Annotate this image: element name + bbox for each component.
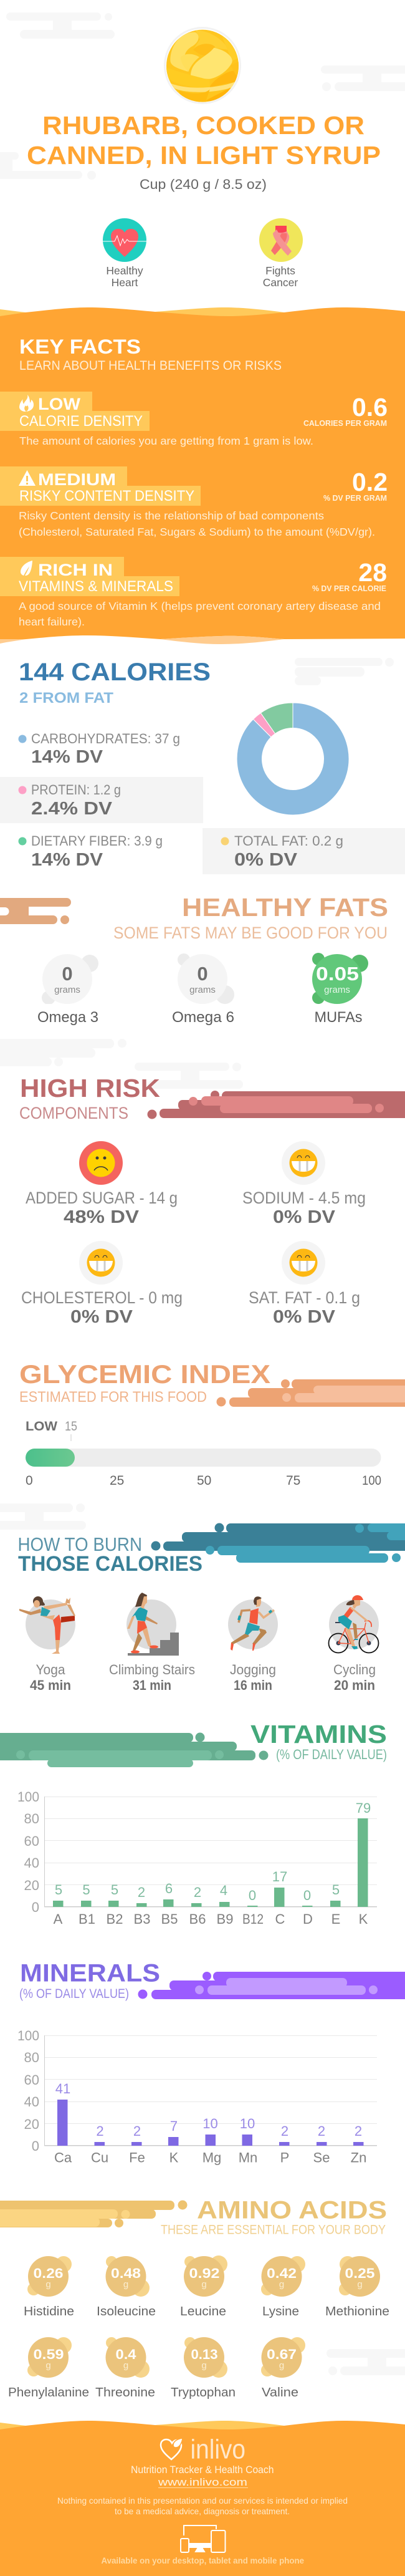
item: added sugar: 48% DV [64,1207,140,1227]
gauge: glycemic index: LOW [26,1419,57,1434]
legend: carbohydrates: 14% DV [31,747,103,767]
bar chart: vitamins: B2 [107,1911,123,1927]
amino acid: threonine [95,2337,155,2400]
bar chart: minerals: 2 [355,2123,362,2139]
bar chart: minerals: 2 [281,2123,288,2139]
bar chart: vitamins: B9 [217,1911,233,1927]
labels: activities: Climbing Stairs [109,1662,195,1677]
legend: dietary fiber: DIETARY FIBER: 3.9 g [31,833,163,849]
heading: key facts [19,335,282,373]
amino acid: lysine [261,2256,305,2318]
fact: medium risky content density: Risky Content density is the relationship of bad components [19,509,324,522]
amino acid: leucine: 0.92 [189,2265,219,2281]
bar chart: minerals: K [169,2150,179,2165]
fact: medium risky content density [0,466,388,538]
legend: protein [0,777,203,823]
bar chart: vitamins: 0 [32,1899,39,1915]
amino acid: histidine: 0.26 [34,2265,64,2281]
label: fights cancer: Fights [265,264,295,277]
amino acid: phenylalanine: Phenylalanine [8,2386,89,2400]
heading: amino acids: AMINO ACIDS [197,2196,387,2224]
bar chart: minerals: 10 [240,2116,255,2131]
amino acid: valine: g [279,2360,284,2371]
heading: amino acids [161,2196,387,2237]
bar chart: minerals: Cu [91,2150,108,2165]
amino acid: tryptophan: Tryptophan [171,2386,236,2400]
amino acid: isoleucine: Isoleucine [97,2305,156,2318]
fact: medium risky content density: % DV PER GRAM [323,493,387,503]
bar chart: minerals: 41 [55,2081,70,2096]
bar chart: vitamins: K [359,1911,368,1927]
labels: activities: Yoga [36,1662,65,1677]
bar chart: vitamins: 100 [17,1789,39,1805]
bar chart: vitamins: 60 [24,1833,39,1849]
heading: healthy fats: HEALTHY FATS [182,893,388,922]
amino acid: isoleucine [97,2256,156,2318]
label: healthy heart: Healthy [106,264,143,277]
amino acid: methionine: g [357,2279,363,2290]
title: CANNED, IN LIGHT SYRUP [27,141,381,170]
labels: activities: 45 min [30,1677,71,1693]
bar chart: vitamins: 80 [24,1811,39,1826]
bar chart: minerals: Zn [351,2150,366,2165]
fact: rich in vitamins and minerals [0,557,387,628]
heading: calories [19,658,211,707]
legend: carbohydrates: CARBOHYDRATES: 37 g [31,731,180,746]
bubble: MUFAs: 0.05 [316,963,359,985]
bar chart: vitamins: 0 [303,1888,311,1903]
amino acid: lysine: 0.42 [267,2265,297,2281]
heading: how to burn those calories: THOSE CALORIES [18,1552,202,1576]
bubble: MUFAs [312,953,368,1026]
bar chart: vitamins: B6 [189,1911,206,1927]
bar chart: minerals: 10 [202,2116,218,2131]
bar chart: vitamins: 5 [332,1882,340,1898]
heading: key facts: KEY FACTS [19,335,141,358]
bar chart: minerals: 40 [24,2094,39,2110]
amino acid: threonine: Threonine [95,2386,155,2400]
bar chart: vitamins: B5 [161,1911,178,1927]
banner: vitamins [0,1732,268,1767]
amino acid: tryptophan [171,2337,236,2400]
bar chart: vitamins: 2 [138,1884,145,1900]
legend: protein: 2.4% DV [31,799,113,819]
bar chart: minerals: 60 [24,2072,39,2088]
heading: key facts: LEARN ABOUT HEALTH BENEFITS OR RISKS [19,359,282,373]
legend: total fat: 0% DV [234,850,298,870]
amino acid: isoleucine: g [123,2279,128,2290]
amino acid: valine [261,2337,305,2400]
heading: minerals: (% OF DAILY VALUE) [19,1987,129,2001]
disclaimer: Nothing contained in this presentation and our services is intended or implied [57,2496,348,2506]
heading: how to burn those calories: HOW TO BURN [17,1533,142,1555]
fact: low calorie density: CALORIES PER GRAM [303,418,387,428]
bubble: omega 3: 0 [62,963,73,985]
amino acid: threonine: 0.4 [116,2347,136,2362]
bubble: omega 6: 0 [197,963,208,985]
banner: minerals [138,1972,405,1999]
amino acid: histidine: Histidine [24,2305,74,2318]
bar chart: vitamins: C [275,1911,285,1927]
fact: rich in vitamins and minerals: 28 [358,558,387,587]
activity: climbing stairs [126,1593,179,1656]
bar chart: minerals: 2 [133,2123,141,2139]
bar chart: vitamins: 2 [194,1884,201,1900]
amino acid: histidine: g [45,2279,51,2290]
gauge: glycemic index: 75 [286,1474,300,1488]
bar chart: vitamins: 17 [272,1869,287,1884]
amino acid: threonine: g [123,2360,128,2371]
label: fights cancer: Cancer [263,276,298,289]
bar chart: minerals: 2 [318,2123,325,2139]
panel: key facts [0,307,405,644]
bubble: omega 3 [37,954,98,1026]
heading: vitamins [250,1720,387,1762]
bar chart: vitamins: E [331,1911,340,1927]
labels: activities [30,1662,376,1693]
amino acid: tryptophan: 0.13 [191,2347,218,2362]
label: healthy heart [106,264,143,289]
title: RHUBARB, COOKED OR [42,111,364,140]
logo: inlivo: inlivo [191,2434,245,2464]
bar chart: vitamins: 40 [24,1855,39,1871]
logo: inlivo [161,2434,245,2464]
fact: rich in vitamins and minerals: RICH IN [38,561,113,579]
heading: minerals: MINERALS [20,1959,160,1987]
heading: glycemic index: GLYCEMIC INDEX [19,1359,270,1389]
bar chart: vitamins: 0 [249,1888,256,1903]
serving size: Cup (240 g / 8.5 oz) [140,176,267,192]
amino acid: leucine: Leucine [180,2305,226,2318]
heading: healthy fats [113,893,388,942]
bar chart: vitamins: 20 [24,1878,39,1893]
item: saturated fat [249,1241,360,1327]
amino acid: isoleucine: 0.48 [111,2265,141,2281]
banner: healthy fats [0,898,71,924]
item: sodium: 0% DV [273,1207,336,1227]
icon: healthy heart [103,218,146,262]
item: saturated fat: SAT. FAT - 0.1 g [249,1288,360,1307]
icon: cancer ribbon [259,218,303,262]
title [27,111,381,170]
gauge: glycemic index: 15 [65,1419,77,1434]
heading: high risk [19,1074,160,1122]
heading: glycemic index: ESTIMATED FOR THIS FOOD [19,1389,207,1406]
bar chart: minerals: 7 [170,2118,178,2134]
donut chart: macronutrients [237,703,349,815]
labels: activities: 31 min [133,1677,171,1693]
label: fights cancer [263,264,298,289]
amino acid: leucine [180,2255,227,2318]
amino acid: phenylalanine: 0.59 [34,2347,64,2362]
labels: activities: 16 min [234,1677,272,1693]
gauge: glycemic index: 50 [197,1474,211,1488]
amino acid: lysine: g [279,2279,284,2290]
bar chart: minerals: 0 [32,2138,39,2154]
fact: rich in vitamins and minerals: heart failure). [19,615,85,628]
bar chart: vitamins: B3 [134,1911,150,1927]
fact: rich in vitamins and minerals: % DV PER CALORIE [312,584,386,593]
heading: high risk: COMPONENTS [19,1104,128,1122]
bar chart: minerals: 80 [24,2050,39,2065]
amino acid: lysine: Lysine [262,2305,299,2318]
tagline: Nutrition Tracker & Health Coach [131,2464,274,2476]
banner: amino acids [0,2200,187,2227]
banner: burn calories [151,1523,405,1563]
amino acid: tryptophan: g [201,2360,207,2371]
fact: medium risky content density: MEDIUM [38,470,116,489]
bar chart: vitamins: 6 [165,1881,173,1896]
fact: low calorie density: 0.6 [352,393,388,422]
heading: calories: 144 CALORIES [19,658,211,686]
website link: www.inlivo.com [158,2476,247,2488]
heading: healthy fats: SOME FATS MAY BE GOOD FOR YOU [113,924,388,942]
item: saturated fat: 0% DV [273,1307,336,1327]
fact: rich in vitamins and minerals: VITAMINS & MINERALS [19,578,173,595]
amino acid: leucine: g [201,2279,207,2290]
bar chart: minerals [17,2028,377,2165]
heading: high risk: HIGH RISK [20,1074,160,1102]
bar chart: vitamins: B1 [79,1911,95,1927]
availability note: Available on your desktop, tablet and mobile phone [101,2555,304,2565]
bar chart: minerals: Se [313,2150,330,2165]
item: cholesterol: 0% DV [70,1307,133,1327]
amino acid: methionine: 0.25 [345,2265,375,2281]
item: cholesterol [21,1241,183,1327]
heading: how to burn those calories [17,1533,202,1576]
bar chart: vitamins: D [303,1911,313,1927]
fact: rich in vitamins and minerals: A good source of Vitamin K (helps prevent coronary artery disease and [19,600,381,612]
bar chart: vitamins: 5 [111,1882,118,1898]
fact: medium risky content density: RISKY CONTENT DENSITY [19,488,194,504]
bar chart: minerals: 100 [17,2028,39,2043]
fact: medium risky content density: (Cholesterol, Saturated Fat, Sugars & Sodium) to the amount (%DV/gr). [19,526,375,538]
disclaimer: to be a medical advice, diagnosis or treatment. [115,2506,290,2516]
fact: low calorie density [0,392,388,447]
gauge: glycemic index: 100 [362,1474,381,1488]
amino acid: histidine [24,2256,74,2318]
amino acid: phenylalanine [8,2337,89,2400]
legend: protein: PROTEIN: 1.2 g [31,782,121,798]
bar chart: vitamins: 5 [55,1882,62,1898]
heading: glycemic index [19,1359,270,1406]
bar chart: minerals: Mn [239,2150,257,2165]
fact: low calorie density: CALORIE DENSITY [19,413,143,430]
fact: medium risky content density: 0.2 [352,468,388,496]
bar chart: minerals: Ca [54,2150,72,2165]
amino acid: phenylalanine: g [45,2360,51,2371]
panel: footer [0,2421,405,2576]
bar chart: minerals: Mg [202,2150,221,2165]
bar chart: vitamins: 79 [356,1800,371,1816]
bubble: omega 6: grams [189,985,216,995]
gauge: glycemic index [26,1419,381,1488]
activity: jogging [228,1596,278,1651]
bar chart: vitamins: A [54,1911,63,1927]
icon: devices [181,2525,226,2552]
labels: activities: 20 min [334,1677,375,1693]
legend: dietary fiber: 14% DV [31,850,103,870]
bar chart: vitamins: 5 [82,1882,90,1898]
bubble: omega 6: Omega 6 [172,1009,234,1026]
label: healthy heart: Heart [112,276,138,289]
item: added sugar: ADDED SUGAR - 14 g [26,1189,178,1207]
labels: activities: Cycling [333,1662,376,1677]
legend: carbohydrates [19,731,180,767]
amino acid: valine: Valine [262,2386,298,2400]
amino acid: methionine: Methionine [325,2305,389,2318]
item: sodium: SODIUM - 4.5 mg [242,1189,366,1207]
heading: vitamins: VITAMINS [250,1720,387,1749]
fact: low calorie density: The amount of calories you are getting from 1 gram is low. [19,435,313,447]
item: added sugar [26,1141,178,1227]
bubble: MUFAs: grams [324,985,350,995]
heading: minerals [19,1959,160,2001]
gauge: glycemic index: 0 [26,1474,33,1488]
bar chart: minerals: P [280,2150,289,2165]
banner: high risk [147,1091,405,1119]
disclaimer [57,2496,348,2516]
gauge: glycemic index: 25 [110,1474,124,1488]
amino acid: methionine [325,2256,389,2318]
item: sodium [242,1141,366,1227]
bar chart: vitamins [17,1789,377,1927]
bubble: omega 3: Omega 3 [37,1009,98,1026]
amino acid: valine: 0.67 [267,2347,297,2362]
bubble: MUFAs: MUFAs [314,1009,363,1026]
bar chart: minerals: 20 [24,2116,39,2132]
bar chart: minerals: Fe [129,2150,145,2165]
bar chart: minerals: 2 [96,2123,104,2139]
bar chart: vitamins: B12 [242,1911,264,1927]
bubble: omega 6 [172,953,234,1026]
fact: low calorie density: LOW [38,395,81,413]
labels: activities: Jogging [230,1662,276,1677]
legend: total fat [202,828,405,874]
activity: yoga [19,1596,75,1654]
item: cholesterol: CHOLESTEROL - 0 mg [21,1288,183,1307]
legend: total fat: TOTAL FAT: 0.2 g [234,833,343,849]
legend: dietary fiber [19,833,163,870]
banner: glycemic index [217,1379,405,1407]
food photo: peach slices [164,27,241,104]
bubble: omega 3: grams [54,985,80,995]
bar chart: vitamins: 4 [220,1883,227,1898]
activity: cycling [329,1595,379,1652]
heading: calories: 2 FROM FAT [19,690,113,707]
